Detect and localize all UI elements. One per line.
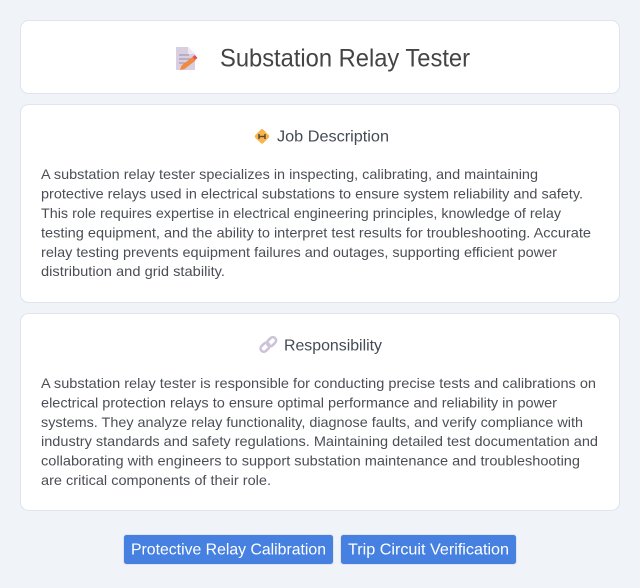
icon: chain link xyxy=(259,336,277,353)
text block: responsibility: A substation relay tester is responsible for conducting precise tests and calibrations on xyxy=(41,375,596,391)
text block: responsibility: systems. They analyze relay functionality, diagnose faults, and verify compliance with xyxy=(41,414,583,430)
text block: responsibility: electrical protection relays to ensure optimal performance and reliability in power xyxy=(41,394,557,410)
text block: responsibility: industry standards and safety regulations. Maintaining detailed test documentation and xyxy=(41,433,598,449)
tag: trip circuit verification: Trip Circuit Verification xyxy=(348,542,509,558)
text block: responsibility: collaborating with engineers to support substation maintenance and troubleshooting xyxy=(41,452,580,468)
heading: responsibility: Responsibility xyxy=(284,338,382,354)
tag: trip circuit verification xyxy=(340,534,516,564)
text block: job description xyxy=(41,166,591,279)
icon: memo with pencil xyxy=(176,47,198,70)
text block: responsibility xyxy=(41,375,598,488)
text block: job description: A substation relay tester specializes in inspecting, calibrating, and maintaining xyxy=(41,166,538,182)
text block: job description: distribution and grid stability. xyxy=(41,263,225,279)
heading: job description: Job Description xyxy=(277,128,389,146)
tag: protective relay calibration xyxy=(124,534,334,564)
panel: job description xyxy=(20,104,620,302)
tag: protective relay calibration: Protective Relay Calibration xyxy=(131,542,326,558)
text block: job description: relay testing prevents equipment failures and outages, supporting efficient power xyxy=(41,244,557,260)
text block: job description: protective relays used in electrical substations to ensure system reliability and safety. xyxy=(41,186,583,202)
heading: title text: Substation Relay Tester xyxy=(220,44,470,72)
panel: title xyxy=(20,20,620,94)
panel: responsibility xyxy=(20,314,620,510)
text block: responsibility: are critical components of their role. xyxy=(41,472,271,488)
icon: construction diamond xyxy=(254,128,270,144)
text block: job description: This role requires expertise in electrical engineering principles, knowledge of relay xyxy=(41,205,561,221)
text block: job description: testing equipment, and the ability to interpret test results for troubleshooting. Accurate xyxy=(41,224,591,240)
